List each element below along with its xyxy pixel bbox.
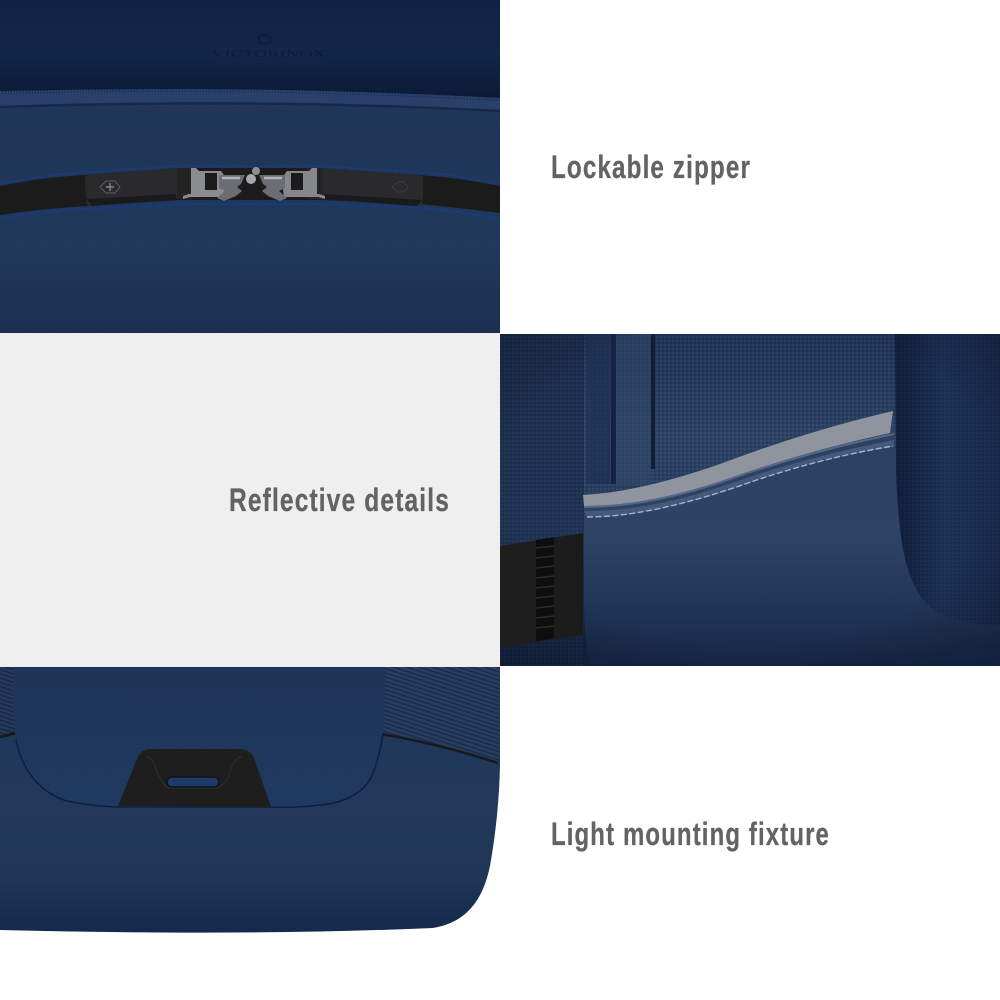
caption: lockable zipper: Lockable zipper [551,149,751,185]
inner lining with logo [0,0,500,98]
zipper metal sliders [177,167,325,201]
black strap [500,533,583,648]
ribbed side fabric [0,667,16,737]
upper fabric panel [13,667,385,808]
panel: lockable zipper photo [0,0,500,333]
inner lining with logo: VICTORINOX [211,49,327,59]
mesh center [584,334,896,504]
piping [381,734,498,763]
panel: reflective details caption background [0,333,500,667]
black mount [118,749,271,807]
panel: light mounting fixture photo [0,667,500,933]
caption: reflective details: Reflective details [229,482,450,518]
caption: light mounting fixture: Light mounting fixture [551,816,830,852]
stitching [587,446,893,517]
zipper pull left [85,168,177,206]
leather pocket [584,428,1000,666]
mesh left strip [500,334,584,612]
right mesh [895,334,1000,625]
reflective strip [583,411,893,506]
zipper pull right [322,168,423,206]
panel: reflective details photo [500,334,1000,666]
top zipper seam [0,92,500,110]
zipper tape [0,168,500,215]
